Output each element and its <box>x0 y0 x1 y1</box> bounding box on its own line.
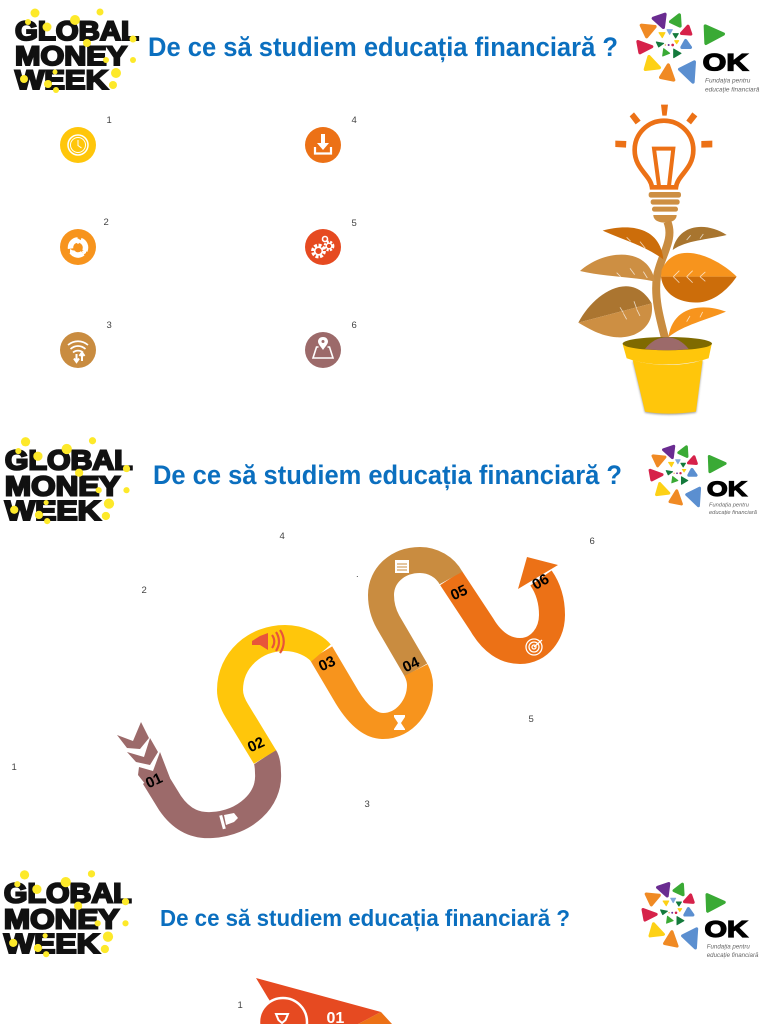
icon: speaker red <box>252 630 284 653</box>
panel: slide 1 with icon list and plant <box>15 8 760 414</box>
stem <box>656 222 669 339</box>
bulb <box>615 105 712 187</box>
logo: OK foundation <box>643 884 759 959</box>
number labels: . <box>356 569 359 580</box>
bulb base <box>649 192 681 223</box>
logo: OK foundation: educație financiară <box>707 952 759 959</box>
number 1: 1 <box>238 1000 243 1011</box>
number 1: 1 <box>106 115 112 126</box>
icon: target <box>526 639 542 655</box>
tail chevrons <box>117 722 170 790</box>
logo: Global Money Week <box>15 8 139 95</box>
icon: gears <box>305 229 341 265</box>
logo: Global Money Week <box>5 437 133 526</box>
number labels: 5 <box>528 714 534 725</box>
number labels: 3 <box>364 799 370 810</box>
leaves <box>578 227 737 337</box>
segment numbers: 05 <box>448 582 470 604</box>
number labels <box>12 531 595 810</box>
icon: recycle <box>60 229 96 265</box>
logo: OK foundation: Fundația pentru <box>709 502 750 508</box>
segment 04 <box>381 560 451 670</box>
number 2: 2 <box>104 217 109 228</box>
segment 01 <box>154 757 268 825</box>
number labels: 2 <box>142 585 147 596</box>
title: De ce să studiem educația financiară ? <box>160 905 570 932</box>
logo: Global Money Week: GLOBAL <box>5 445 133 476</box>
title: De ce să studiem educația financiară ? <box>153 460 622 490</box>
logo: OK foundation: OK <box>707 478 748 501</box>
icon: hourglass <box>394 715 405 730</box>
logo: OK foundation: educație financiară <box>709 510 757 516</box>
logo: Global Money Week: WEEK <box>4 928 100 959</box>
logo: Global Money Week: MONEY <box>15 41 127 71</box>
icon: download <box>305 127 341 163</box>
segment numbers: 04 <box>400 653 423 676</box>
number 5: 5 <box>352 218 357 229</box>
icon: notepad <box>395 560 409 573</box>
logo: Global Money Week: GLOBAL <box>4 878 132 909</box>
logo: Global Money Week <box>4 870 132 959</box>
icon: map pin <box>305 332 341 368</box>
logo: Global Money Week: MONEY <box>4 903 120 934</box>
logo: Global Money Week: MONEY <box>5 470 121 501</box>
title: De ce să studiem educația financiară ? <box>148 32 618 62</box>
icon: hourglass <box>276 1014 288 1023</box>
number labels: 1 <box>12 762 17 773</box>
logo: Global Money Week: WEEK <box>5 495 101 526</box>
pot <box>623 337 712 414</box>
logo: OK foundation: OK <box>705 916 749 942</box>
icon: megaphone white <box>219 813 238 829</box>
illustration: light bulb plant in pot <box>578 105 737 414</box>
number labels: 6 <box>590 536 595 547</box>
segment 02 <box>230 638 321 757</box>
segment numbers: 02 <box>245 734 267 756</box>
icon: clock <box>60 127 96 163</box>
logo: OK foundation: Fundația pentru <box>705 78 751 85</box>
segment 06 arrow <box>451 557 558 651</box>
number 4: 4 <box>352 115 357 126</box>
number 3: 3 <box>106 320 112 331</box>
segment numbers <box>143 571 552 792</box>
chart: winding arrow timeline <box>117 557 558 829</box>
number 6: 6 <box>352 320 357 331</box>
logo: OK foundation: Fundația pentru <box>707 944 750 951</box>
segment numbers: 01 <box>143 770 165 792</box>
logo: OK foundation: educație financiară <box>705 86 760 93</box>
logo: OK foundation <box>638 14 760 93</box>
segment numbers: 06 <box>529 571 552 594</box>
segment numbers: 03 <box>316 653 338 675</box>
number labels: 4 <box>280 531 285 542</box>
cropped wedge diagram <box>256 978 392 1024</box>
logo: OK foundation <box>650 446 757 516</box>
panel: slide 3 partially visible <box>4 870 759 1024</box>
segment 03 <box>321 653 420 726</box>
logo: OK foundation: OK <box>703 50 749 77</box>
logo: Global Money Week: GLOBAL <box>15 16 139 46</box>
logo: Global Money Week: WEEK <box>15 65 109 95</box>
panel: slide 2 with snake timeline <box>5 437 757 829</box>
icon: wifi arrows <box>60 332 96 368</box>
